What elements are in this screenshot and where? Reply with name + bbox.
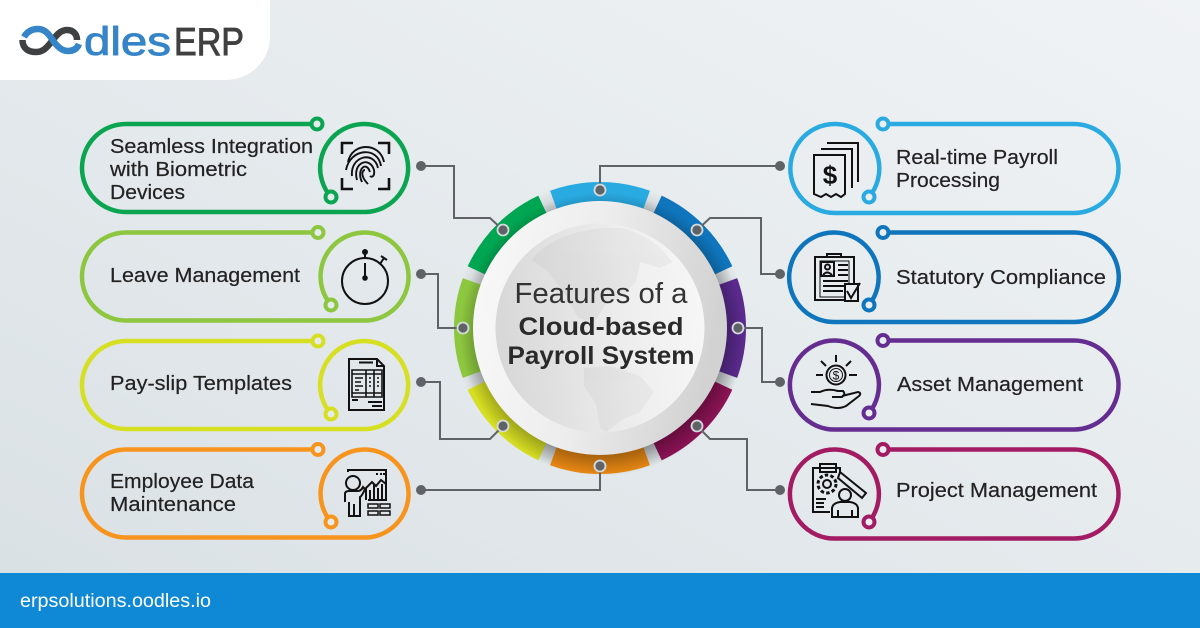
- pill: Asset Management: [790, 335, 1118, 430]
- logo: ERP: [174, 21, 244, 64]
- central title: [508, 278, 694, 370]
- pill: Pay-slip Templates: [82, 336, 408, 429]
- central title: Cloud-based: [518, 313, 684, 341]
- pill: Project Management: [790, 444, 1118, 539]
- pill: Employee Data Maintenance: Maintenance: [110, 494, 236, 516]
- icon: compliance clipboard: [815, 254, 860, 301]
- icon: employee with chart: [345, 470, 390, 516]
- icon: hand holding coin: [811, 355, 860, 408]
- footer bar: [0, 573, 1200, 628]
- pill: Seamless Integration with Biometric Devices: Devices: [110, 182, 185, 204]
- icon: stacked receipts: [814, 143, 858, 197]
- pill: Leave Management: Leave Management: [110, 265, 300, 287]
- footer bar: erpsolutions.oodles.io: [20, 591, 211, 612]
- pill: Statutory Compliance: Statutory Compliance: [896, 267, 1106, 289]
- pill: Seamless Integration with Biometric Devices: with Biometric: [109, 159, 247, 181]
- icon: stacked receipts: $: [823, 160, 838, 190]
- central title: Features of a: [514, 278, 688, 310]
- pill: Pay-slip Templates: Pay-slip Templates: [110, 373, 292, 395]
- pill: Leave Management: [82, 227, 409, 320]
- icon: stopwatch: [342, 250, 388, 304]
- pill: Real-time Payroll Processing: [790, 118, 1118, 213]
- pill: Seamless Integration with Biometric Devices: [82, 118, 408, 212]
- central disk: [473, 201, 727, 455]
- icon: payslip document: [349, 359, 384, 410]
- disk shadow: [460, 192, 744, 476]
- central ring segments: [423, 151, 777, 505]
- icon: project gear and person: [813, 464, 866, 517]
- pill: Employee Data Maintenance: Employee Data: [110, 471, 255, 493]
- icon: fingerprint: [342, 143, 389, 189]
- pill: Asset Management: Asset Management: [897, 374, 1083, 396]
- pill: Seamless Integration with Biometric Devices: Seamless Integration: [110, 136, 313, 158]
- logo: [0, 0, 270, 80]
- disk halo: [453, 181, 747, 475]
- pill: Project Management: Project Management: [896, 480, 1097, 502]
- pill: Real-time Payroll Processing: Real-time Payroll: [896, 147, 1058, 169]
- globe disk: [496, 224, 704, 432]
- connectors: [416, 161, 785, 495]
- icon: hand holding coin: $: [833, 368, 840, 382]
- logo: dles: [84, 20, 171, 64]
- central title: Payroll System: [508, 342, 694, 370]
- pill: Statutory Compliance: [789, 227, 1119, 322]
- pill: Employee Data Maintenance: [82, 444, 409, 538]
- pill: Real-time Payroll Processing: Processing: [896, 170, 1000, 192]
